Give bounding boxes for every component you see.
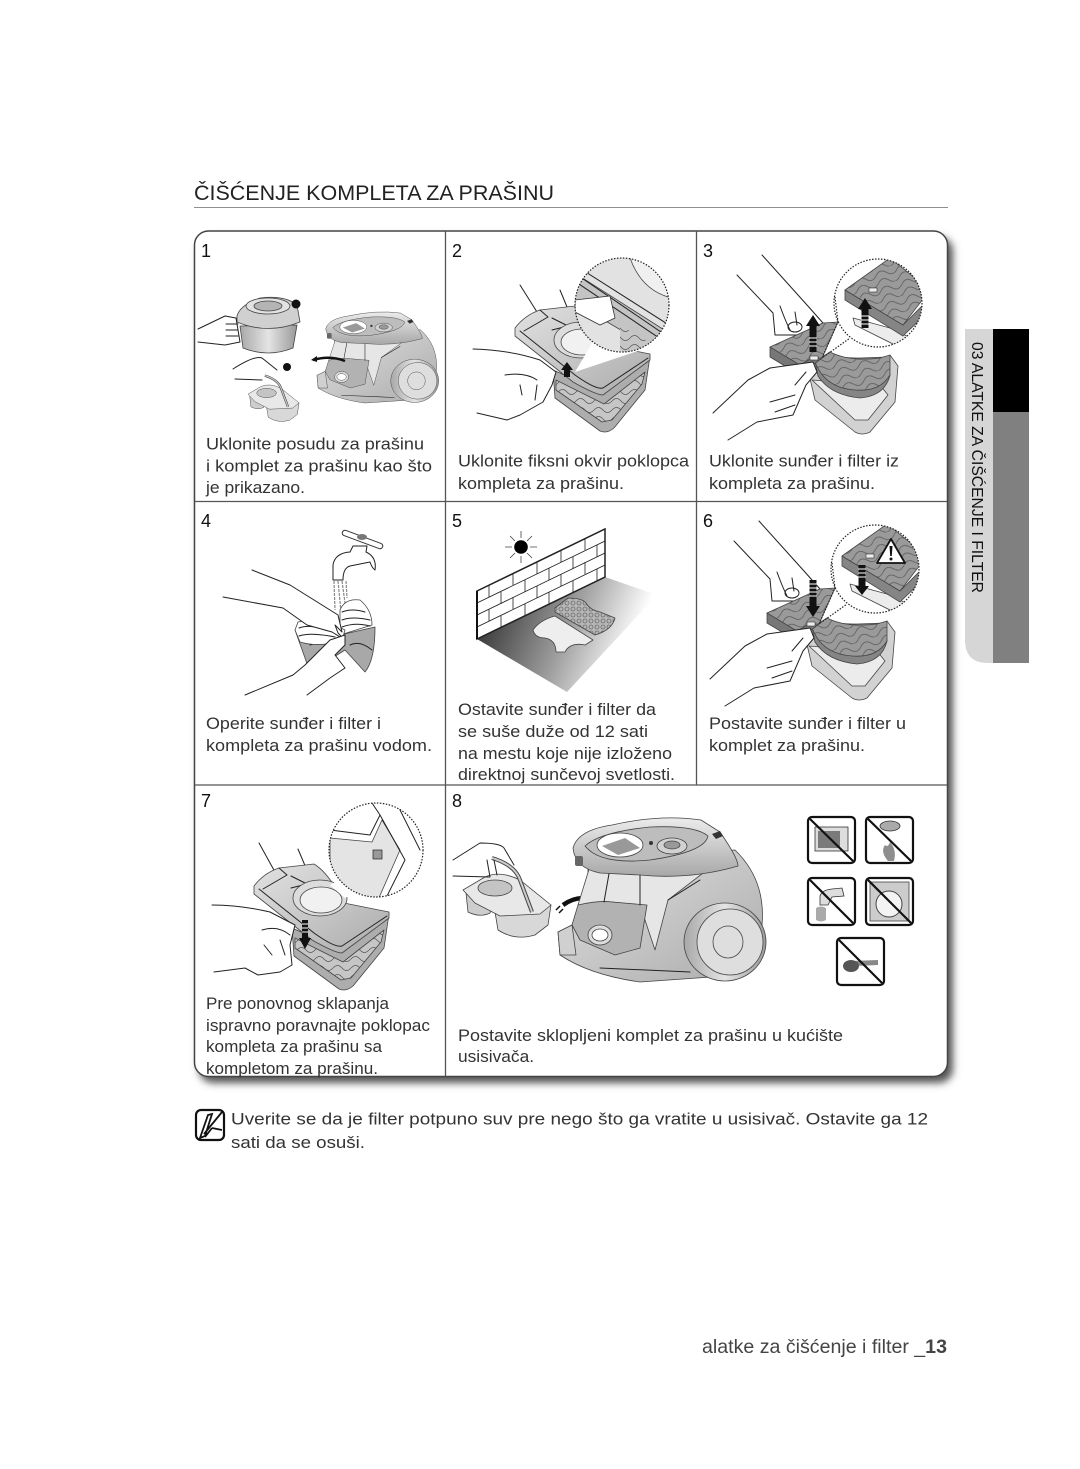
- number 4: 4: [201, 511, 211, 531]
- text 7: Pre ponovnog sklapanja: [206, 994, 390, 1013]
- text 5: se suše duže od 12 sati: [458, 722, 648, 741]
- arrow up left: [806, 315, 820, 352]
- text 1: [205, 434, 432, 497]
- arrow down left: [806, 580, 820, 617]
- note text: sati da se osuši.: [231, 1133, 365, 1152]
- note text: Uverite se da je filter potpuno suv pre nego što ga vratite u usisivač. Ostavite ga 12: [231, 1110, 928, 1128]
- text 7: kompleta za prašinu sa: [206, 1037, 383, 1056]
- text 6: Postavite sunđer i filter u: [709, 714, 906, 733]
- text 3: [709, 452, 899, 493]
- text 5: Ostavite sunđer i filter da: [458, 700, 657, 719]
- floor shadow: [477, 577, 657, 692]
- icon: vacuum cleaner: [558, 818, 766, 982]
- icon: no fire: [866, 817, 913, 863]
- text 7: kompletom za prašinu.: [206, 1059, 378, 1078]
- text 4: [206, 714, 432, 755]
- icon: lid frame removal: [472, 257, 670, 432]
- step 1: [198, 241, 439, 497]
- arrow: curved left: [313, 358, 345, 361]
- text 6: komplet za prašinu.: [709, 736, 865, 755]
- step 3: [703, 241, 930, 493]
- icon: sun: [505, 531, 537, 563]
- icon: brick wall: [477, 529, 605, 645]
- step 6: [703, 511, 927, 755]
- number 6: 6: [703, 511, 713, 531]
- icon: washing under tap: [223, 533, 380, 695]
- text 2: kompleta za prašinu.: [458, 474, 624, 493]
- arrow down detail: [855, 565, 869, 595]
- text 7: [206, 994, 430, 1078]
- arrow up detail: [858, 298, 872, 328]
- step 8: [452, 791, 913, 1066]
- text 2: Uklonite fiksni okvir poklopca: [458, 452, 690, 470]
- side tab: [965, 329, 1029, 663]
- icon: note: [196, 1110, 224, 1140]
- icon: lifting sponge: [713, 255, 930, 440]
- icon: hand holding dust bin: [198, 297, 300, 353]
- text 4: kompleta za prašinu vodom.: [206, 736, 432, 755]
- icon: warning triangle: [877, 539, 905, 563]
- step 7: [201, 791, 430, 1078]
- text 1: je prikazano.: [205, 478, 305, 497]
- side tab label: 03 ALATKE ZA ČIŠĆENJE I FILTER: [968, 342, 985, 593]
- arrow head: [311, 356, 317, 362]
- page footer: alatke za čišćenje i filter _13: [702, 1336, 947, 1358]
- icon: hand holding filter: [453, 843, 551, 937]
- step 5: [452, 511, 675, 784]
- icon: filter drying: [533, 616, 593, 652]
- text 3: Uklonite sunđer i filter iz: [709, 452, 899, 470]
- text 6: [709, 714, 906, 755]
- text 4: Operite sunđer i filter i: [206, 714, 381, 733]
- icon: no brush: [837, 938, 884, 985]
- title rule: [194, 207, 948, 208]
- number 5: 5: [452, 511, 462, 531]
- marker 2: [283, 363, 291, 371]
- text 1: Uklonite posudu za prašinu: [206, 434, 424, 454]
- text 5: [458, 700, 675, 784]
- text 5: na mestu koje nije izloženo: [458, 744, 672, 763]
- arrow down: [299, 920, 311, 949]
- text 8: [458, 1026, 843, 1066]
- icon: no oven: [808, 817, 855, 863]
- text 8: Postavite sklopljeni komplet za prašinu u kućište: [458, 1026, 843, 1045]
- icon: reassembling lid: [212, 800, 425, 990]
- number 2: 2: [452, 241, 462, 261]
- icon: removing filter: [233, 357, 299, 421]
- icon: inserting sponge: [710, 521, 927, 706]
- text 3: kompleta za prašinu.: [709, 474, 875, 493]
- arrow: curved into vacuum: [556, 895, 608, 913]
- note text: [231, 1110, 928, 1152]
- step 4: [201, 511, 432, 755]
- marker 1: [292, 300, 300, 308]
- text 7: ispravno poravnajte poklopac: [206, 1016, 430, 1035]
- text 8: usisivača.: [458, 1047, 534, 1066]
- icon: no washing machine: [866, 878, 913, 925]
- panel shadow: [199, 237, 953, 1083]
- title: ČIŠĆENJE KOMPLETA ZA PRAŠINU: [194, 182, 554, 205]
- text 5: direktnoj sunčevoj svetlosti.: [458, 765, 675, 784]
- arrow up: [561, 362, 573, 377]
- number 7: 7: [201, 791, 211, 811]
- icon: sponge drying: [555, 598, 615, 635]
- step 2: [452, 241, 690, 493]
- number 8: 8: [452, 791, 462, 811]
- number 3: 3: [703, 241, 713, 261]
- panel: steps grid: [194, 231, 948, 1076]
- icon: vacuum opening: [317, 312, 439, 403]
- text 1: i komplet za prašinu kao što: [206, 456, 432, 476]
- number 1: 1: [201, 241, 211, 261]
- icon: no water: [808, 878, 855, 925]
- text 2: [458, 452, 690, 493]
